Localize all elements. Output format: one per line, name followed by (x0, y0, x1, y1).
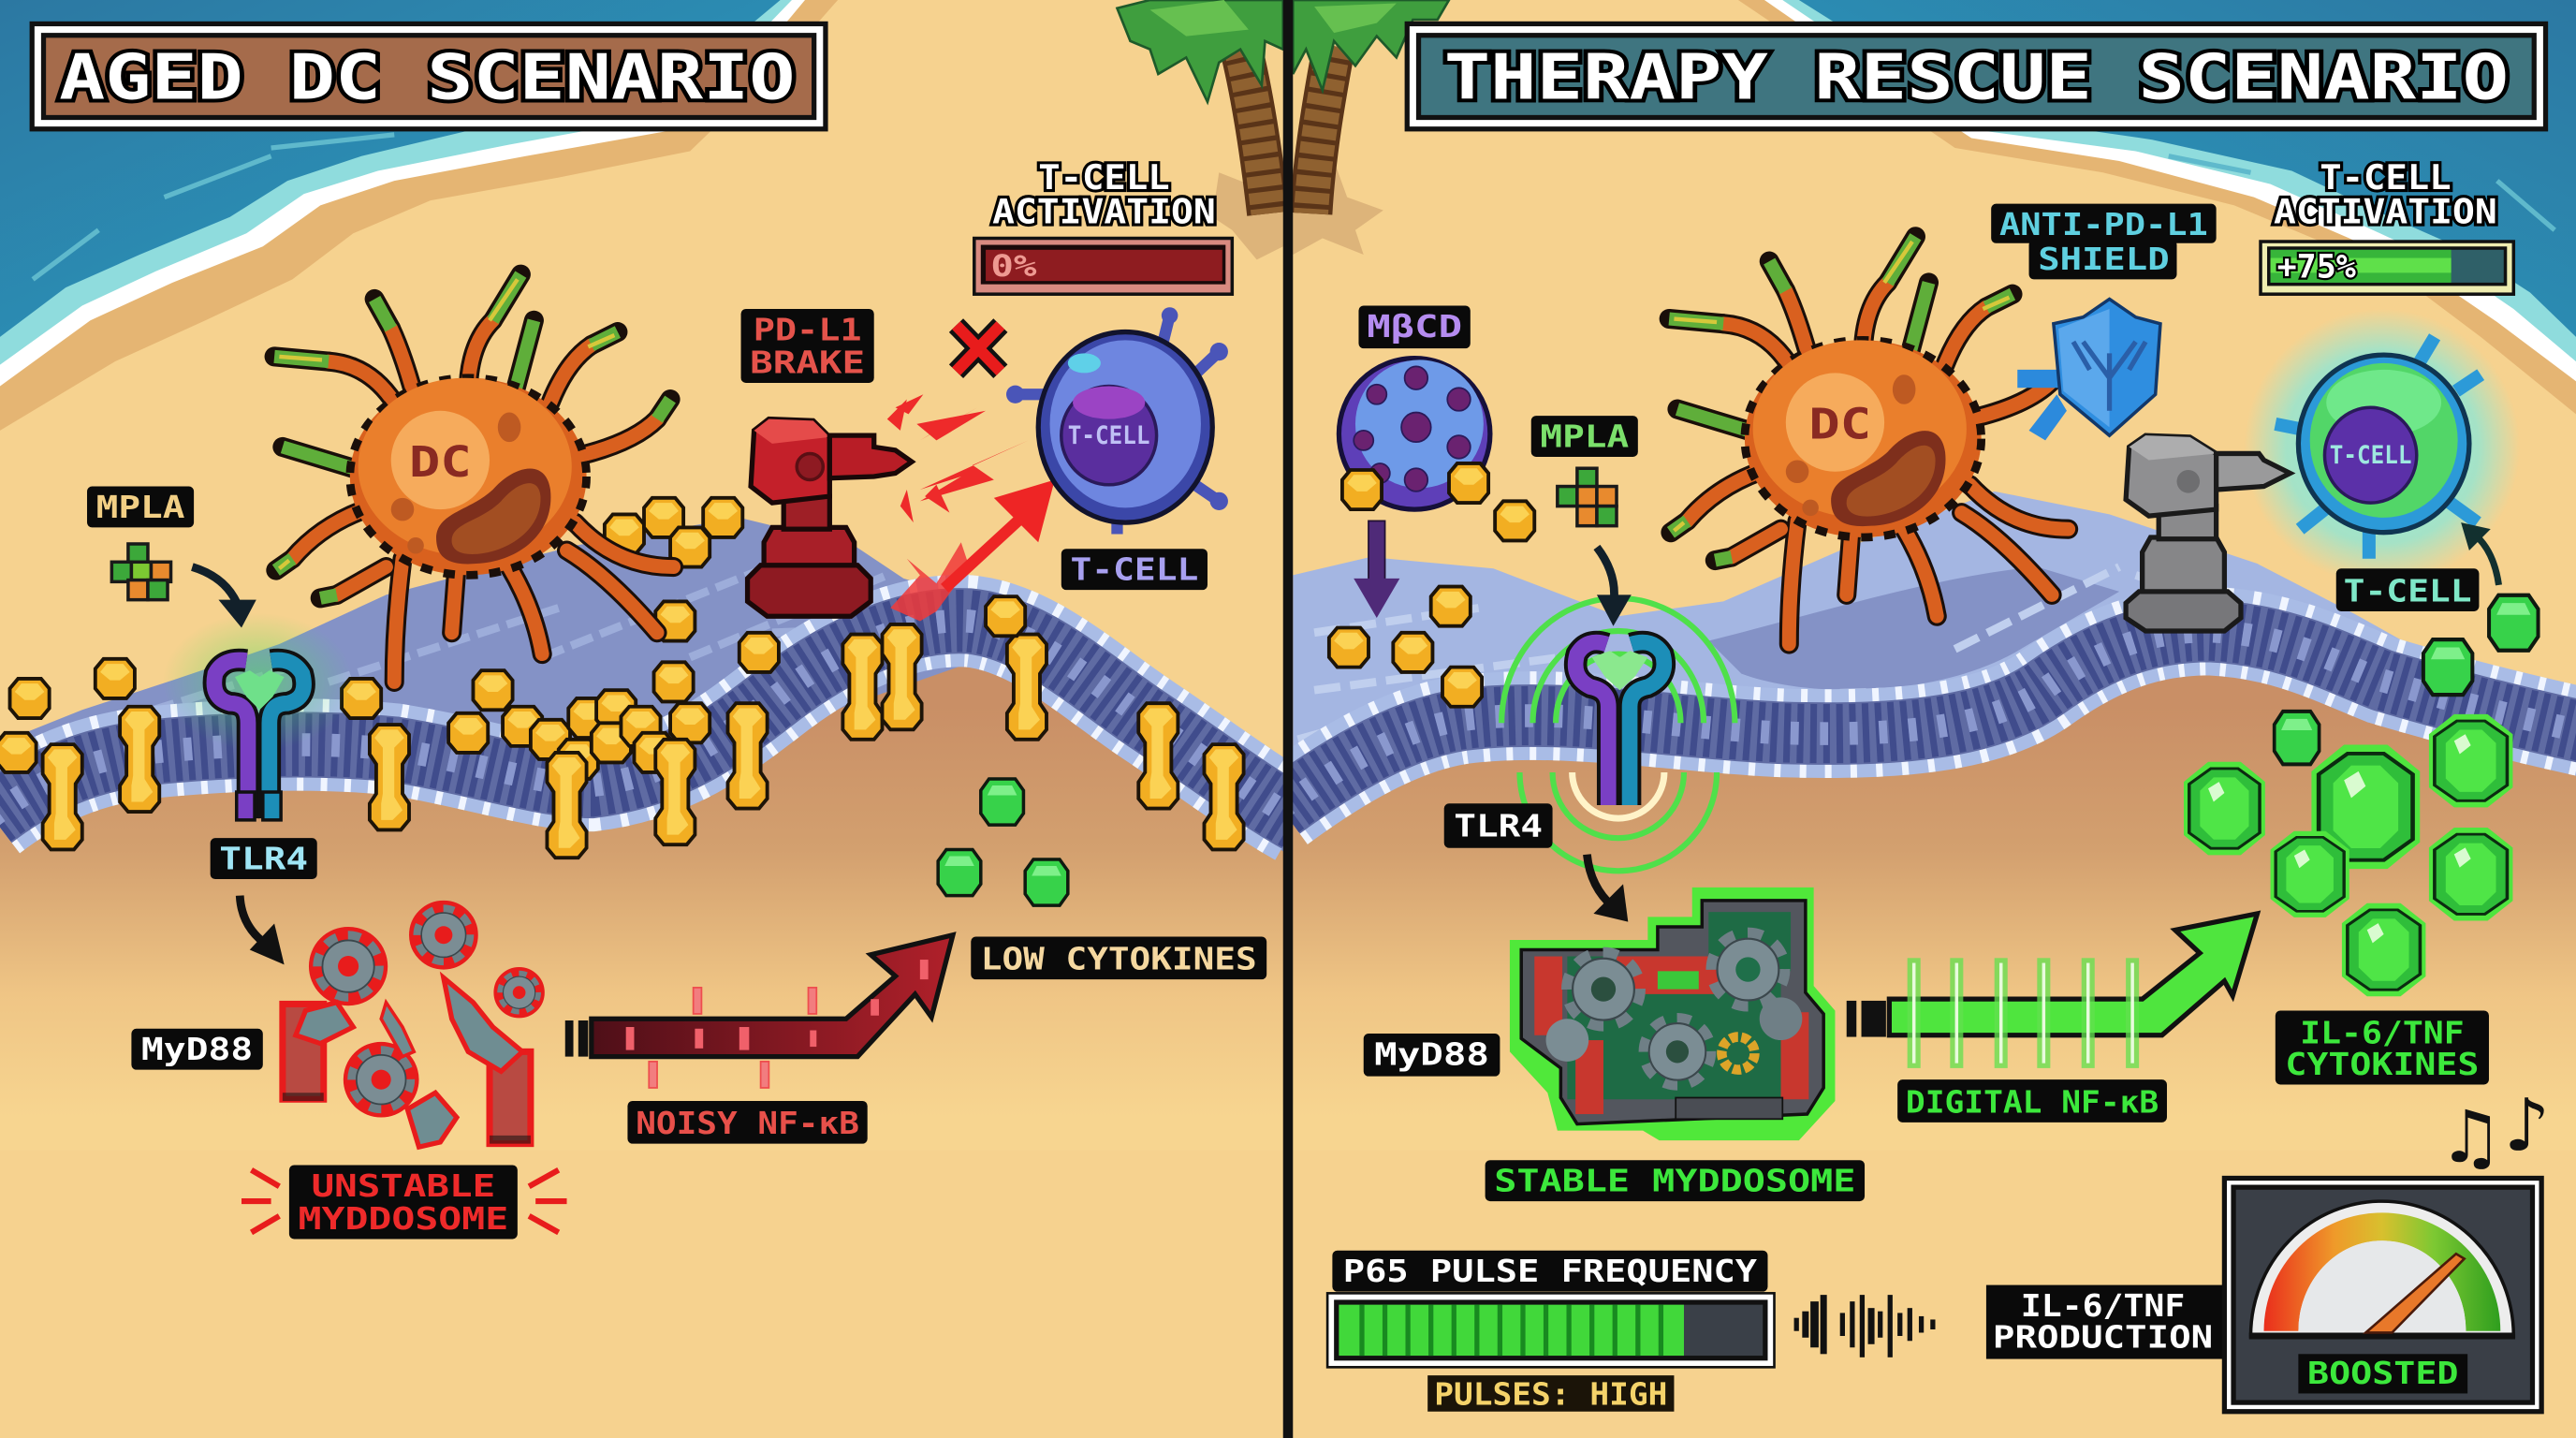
stable myddosome (1510, 888, 1835, 1140)
label: MβCD (1358, 305, 1471, 348)
label: T-CELL ACTIVATION left (992, 157, 1216, 232)
cytokines: low (938, 779, 1068, 905)
label: T-CELL left: T-CELL (1070, 551, 1198, 588)
label: MyD88 left (131, 1029, 263, 1070)
receptor: TLR4 rescued with signal rings (1501, 598, 1734, 871)
label: T-CELL ACTIVATION right: T-CELL (2320, 157, 2452, 198)
label: IL-6/TNF PRODUCTION: IL-6/TNF (2021, 1287, 2185, 1324)
T-cell: activated with glow (2244, 309, 2520, 585)
arrow: MβCD extraction (1354, 521, 1399, 618)
label: UNSTABLE MYDDOSOME: MYDDOSOME (299, 1200, 508, 1237)
label: DC: DC (409, 437, 472, 487)
p65 pulse frequency (1327, 1251, 1775, 1367)
icon: red X (956, 326, 1001, 372)
music notes (2438, 1084, 2550, 1180)
label: PD-L1 BRAKE: BRAKE (750, 344, 865, 380)
label: TLR4 right: TLR4 (1454, 807, 1543, 844)
music notes: ♪ (2504, 1084, 2550, 1168)
icon: MPLA left (111, 544, 171, 600)
label: DC: DC (1808, 400, 1871, 449)
arrow: noisy NF-κB (565, 935, 953, 1088)
ocean: right (1738, 0, 2576, 414)
label: STABLE MYDDOSOME: STABLE MYDDOSOME (1494, 1163, 1855, 1199)
blocked signal sparks (887, 394, 1029, 522)
label: T-CELL ACTIVATION right (2274, 157, 2497, 232)
activation bar: 0%: 0% (990, 250, 1036, 284)
label: T-CELL nucleus: T-CELL (2330, 442, 2411, 470)
label: NOISY NF-κB: NOISY NF-κB (636, 1105, 859, 1141)
label: IL-6/TNF CYTOKINES: IL-6/TNF (2300, 1015, 2465, 1051)
palm trees (1117, 0, 1449, 259)
icon: waveform (1794, 1295, 1936, 1357)
label: PD-L1 BRAKE: PD-L1 (754, 311, 862, 347)
icon: MPLA right (1558, 468, 1617, 526)
activation bar: 0% (974, 239, 1232, 294)
unstable myddosome (283, 903, 541, 1147)
icon: anti-PD-L1 shield (2017, 299, 2160, 440)
dendritic cell: rescued (1669, 237, 2069, 644)
title: aged DC (30, 22, 828, 131)
warning ticks around unstable label (242, 1170, 567, 1232)
gauge dial (2249, 1201, 2515, 1340)
label: P65 PULSE FREQUENCY: P65 PULSE FREQUENCY (1343, 1253, 1757, 1289)
title: therapy rescue (1405, 22, 2548, 131)
arrow: TLR4 to unstable MyD88 (240, 896, 285, 964)
dendritic cell: aged (274, 274, 674, 682)
activation bar: +75%: +75% (2277, 248, 2356, 286)
activation bar: +75% (2261, 242, 2513, 294)
label: IL-6/TNF PRODUCTION (1986, 1285, 2226, 1359)
lipid rafts: aged cholesterol cluster (0, 498, 1244, 858)
label: MyD88 right: MyD88 (1374, 1035, 1489, 1072)
arrow: MPLA to TLR4 right (1597, 547, 1632, 626)
label: T-CELL right (2336, 568, 2479, 611)
label: T-CELL ACTIVATION left: T-CELL (1038, 157, 1170, 198)
membrane: right (1281, 492, 2576, 814)
arrow: digital NF-κB (1847, 914, 2258, 1068)
label: ANTI-PD-L1 SHIELD: ANTI-PD-L1 (1999, 206, 2208, 242)
wet cytoplasm: right (1293, 676, 2576, 1032)
label: IL-6/TNF CYTOKINES: CYTOKINES (2285, 1046, 2479, 1082)
membrane: left (0, 518, 1298, 855)
label: LOW CYTOKINES: LOW CYTOKINES (981, 941, 1257, 977)
label: UNSTABLE MYDDOSOME: UNSTABLE (312, 1167, 495, 1204)
cannon: PD-L1 disarmed grey (2126, 435, 2291, 631)
label: DIGITAL NF-κB: DIGITAL NF-κB (1906, 1083, 2159, 1120)
arrow: red inhibition ray (890, 480, 1055, 621)
cannon: PD-L1 brake red (748, 419, 912, 616)
label: T-CELL left (1061, 549, 1208, 590)
wet cytoplasm: left (0, 667, 1283, 1032)
T-cell: inactive blue (1006, 307, 1228, 534)
ocean: left (0, 0, 838, 431)
label: PULSES: HIGH: PULSES: HIGH (1434, 1376, 1667, 1413)
label: MyD88 right (1364, 1034, 1500, 1077)
label: ANTI-PD-L1 SHIELD (1991, 204, 2217, 279)
label: MyD88 left: MyD88 (141, 1031, 253, 1067)
arrow: MPLA to TLR4 left (192, 567, 256, 627)
label: T-CELL nucleus: T-CELL (1068, 422, 1150, 450)
label: MPLA right: MPLA (1540, 418, 1629, 454)
label: MPLA left (87, 487, 194, 527)
label: MPLA right (1531, 416, 1638, 457)
label: T-CELL right: T-CELL (2344, 572, 2472, 609)
label: IL-6/TNF CYTOKINES (2276, 1010, 2489, 1084)
music notes: ♫ (2438, 1095, 2503, 1180)
receptor: TLR4 aged (163, 613, 353, 820)
title: therapy rescue: THERAPY RESCUE SCENARIO (1444, 40, 2509, 113)
label: PD-L1 BRAKE (741, 309, 874, 383)
center divider (1283, 0, 1293, 1438)
label: UNSTABLE MYDDOSOME (289, 1165, 518, 1239)
arrow: cytokines to T-cell (2461, 522, 2499, 585)
arrow: TLR4 to stable MyD88 (1587, 855, 1628, 922)
label: TLR4 left: TLR4 (219, 841, 308, 877)
icon: MβCD sphere (1339, 359, 1490, 509)
gauge panel: boosted (2224, 1178, 2541, 1412)
label: TLR4 left (211, 838, 317, 879)
label: MPLA left: MPLA (96, 489, 184, 525)
label: MβCD: MβCD (1367, 308, 1462, 345)
label: T-CELL ACTIVATION left: ACTIVATION (992, 192, 1216, 232)
title: aged DC: AGED DC SCENARIO (59, 40, 795, 113)
label: T-CELL ACTIVATION right: ACTIVATION (2274, 192, 2497, 232)
label: IL-6/TNF PRODUCTION: PRODUCTION (1993, 1318, 2213, 1355)
lipid removed by MβCD (1329, 501, 1534, 707)
label: BOOSTED: BOOSTED (2307, 1355, 2459, 1391)
cytokines: high (2184, 595, 2539, 996)
pulse bar (1327, 1293, 1775, 1367)
label: TLR4 right (1444, 803, 1553, 848)
label: ANTI-PD-L1 SHIELD: SHIELD (2038, 241, 2170, 277)
